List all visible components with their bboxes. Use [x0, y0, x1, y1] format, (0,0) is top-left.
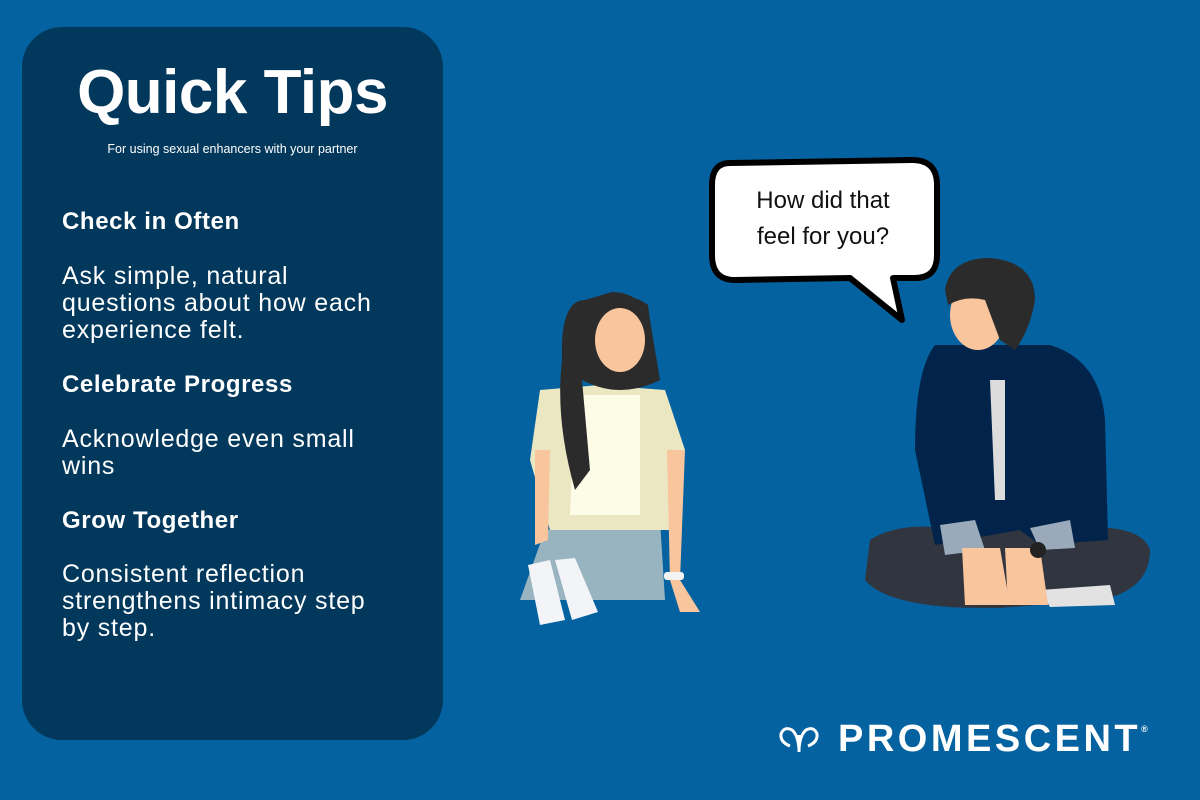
text: celebrate progress: wins [62, 452, 115, 480]
text: grow together: strengthens intimacy step [62, 587, 365, 615]
panel: quick tips [22, 27, 443, 740]
text: celebrate progress [62, 425, 355, 480]
text: check in often: Ask simple, natural [62, 262, 288, 290]
text: check in often: experience felt. [62, 316, 244, 344]
heading: check in often: Check in Often [62, 208, 240, 235]
figure: man [865, 258, 1150, 608]
heading: celebrate progress: Celebrate Progress [62, 371, 293, 398]
logo: PROMESCENT® [838, 718, 1151, 760]
subtitle: For using sexual enhancers with your partner [107, 142, 358, 156]
figure: woman [520, 292, 700, 625]
text: grow together: by step. [62, 614, 156, 642]
text: check in often: questions about how each [62, 289, 372, 317]
logo icon [781, 729, 817, 752]
speech bubble: How did that [756, 187, 890, 214]
speech bubble: feel for you? [757, 223, 889, 250]
text: grow together: Consistent reflection [62, 560, 305, 588]
text: celebrate progress: Acknowledge even small [62, 425, 355, 453]
heading: grow together: Grow Together [62, 507, 239, 534]
title: Quick Tips [77, 58, 388, 127]
text: check in often [62, 262, 372, 344]
text: grow together [62, 560, 365, 642]
speech bubble [712, 160, 937, 320]
